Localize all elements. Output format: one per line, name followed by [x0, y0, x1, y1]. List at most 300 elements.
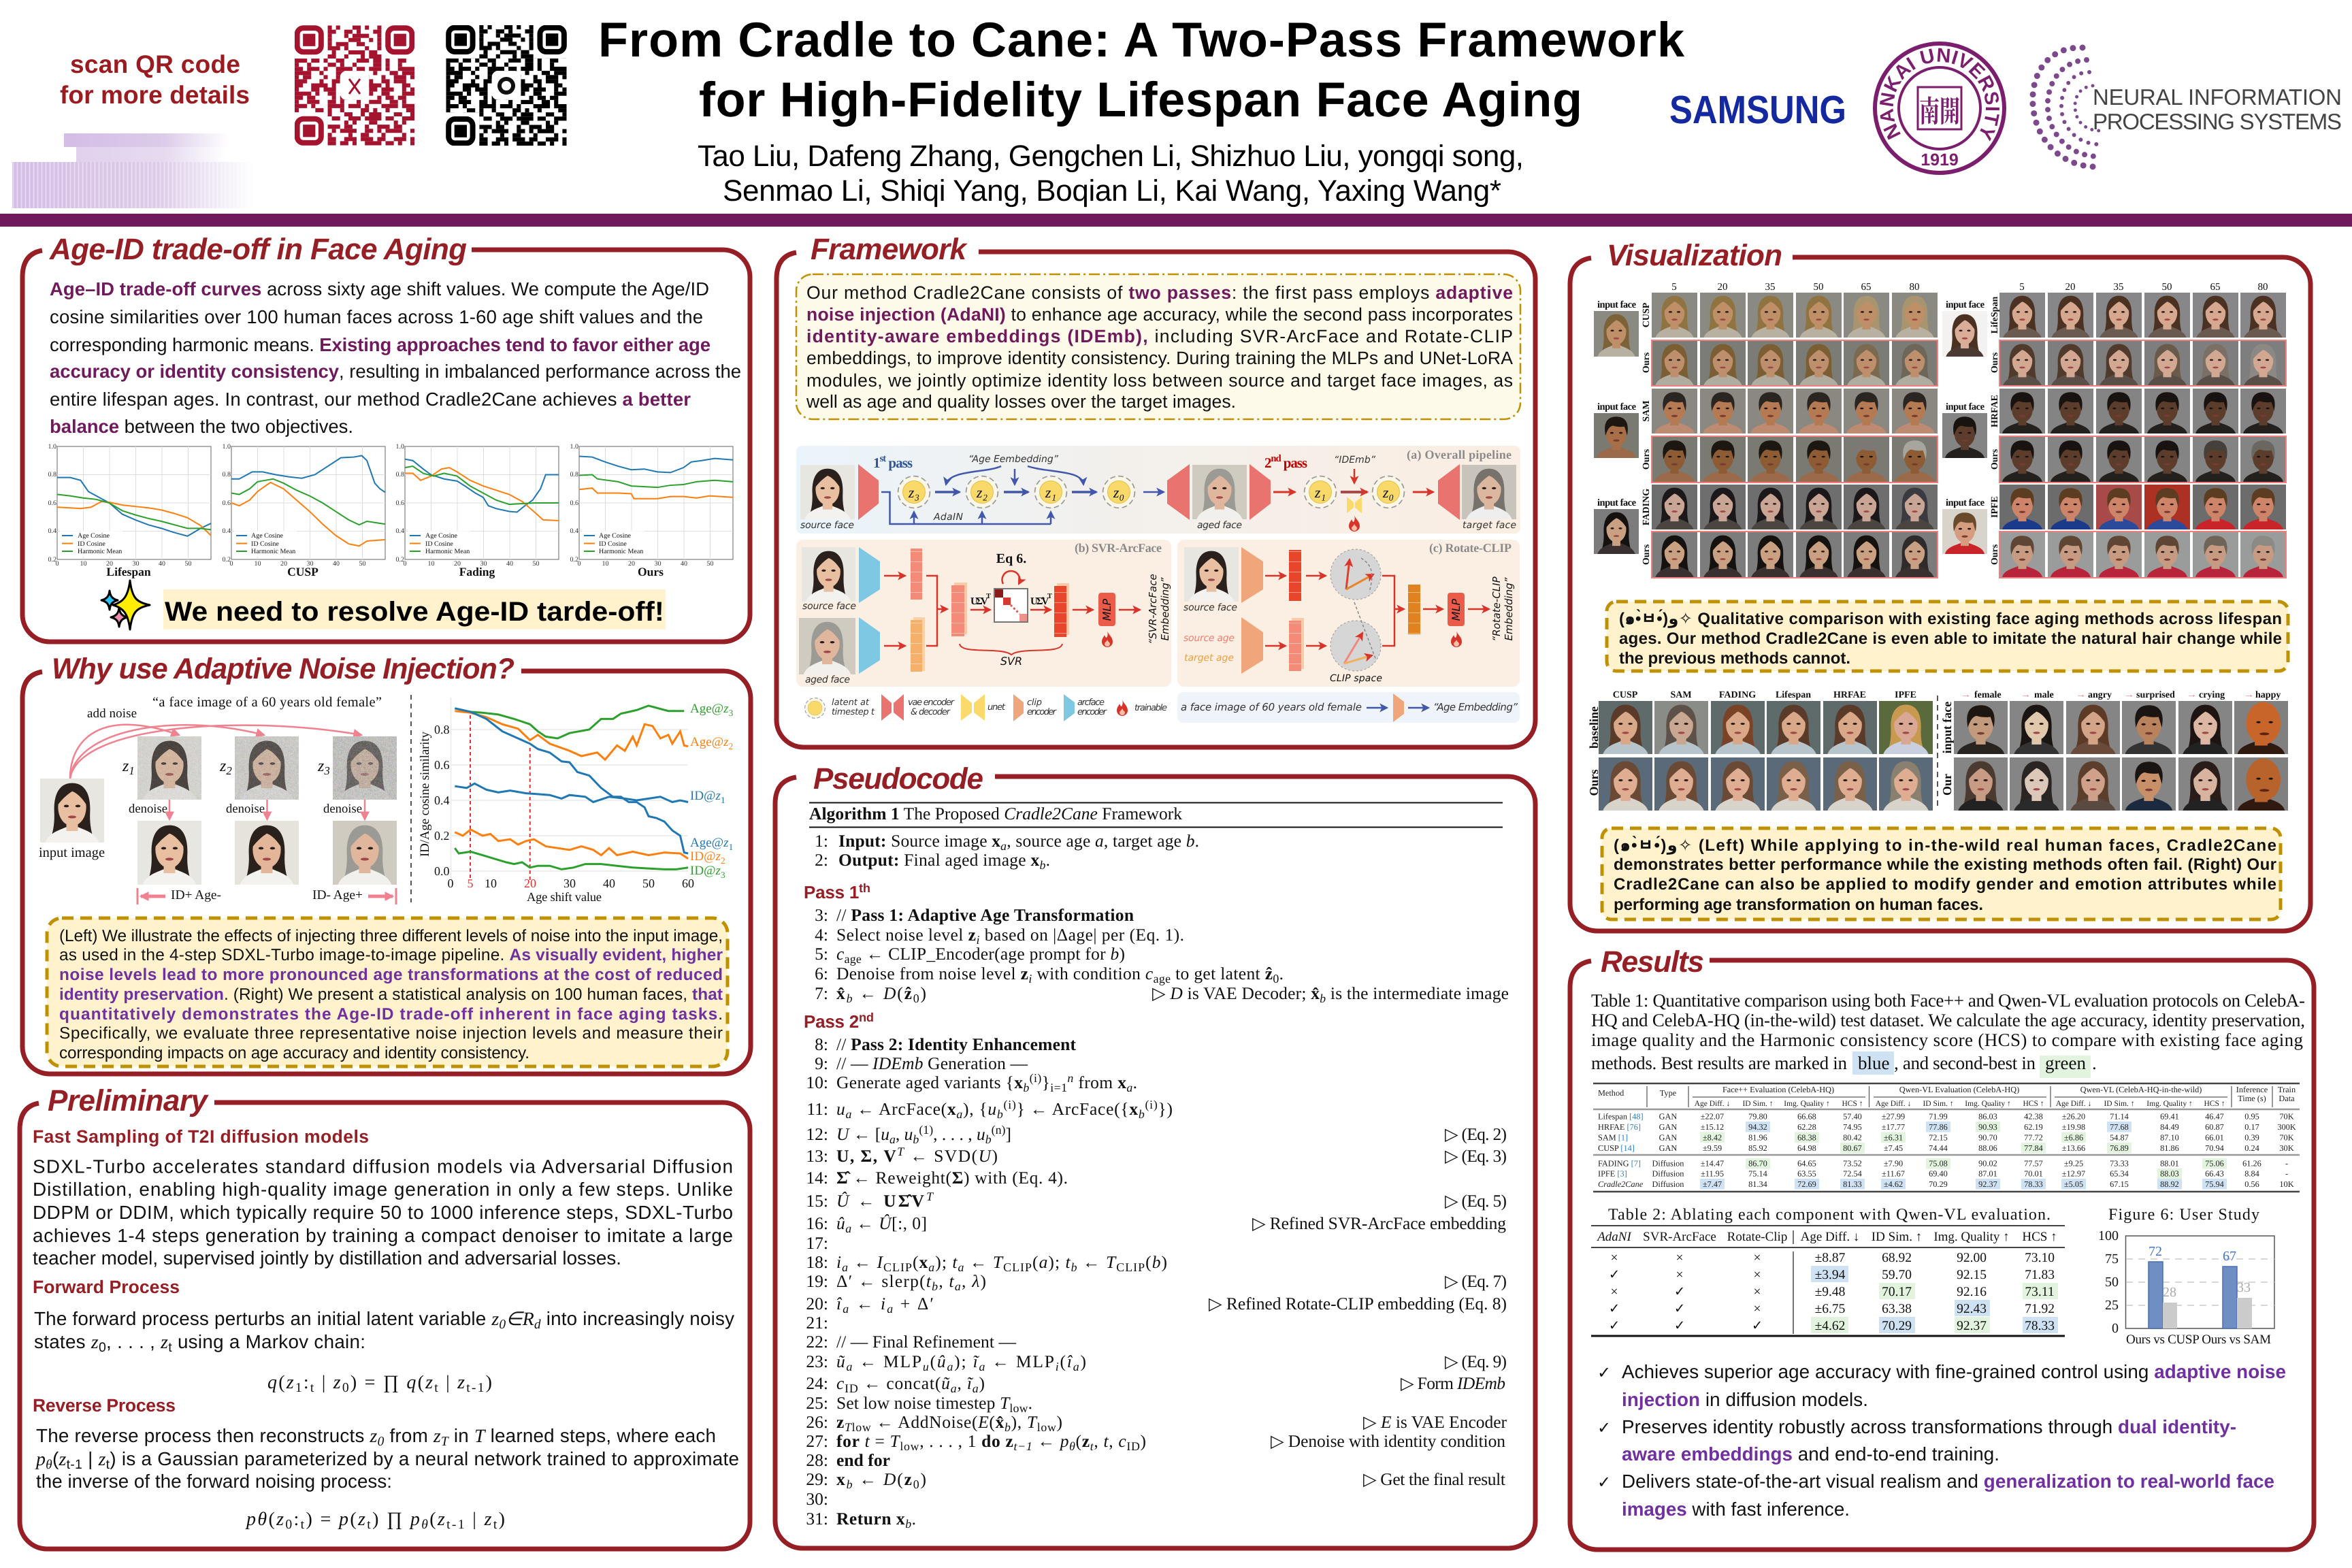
table 1: quantitative comparison: 0.95 [2244, 1112, 2259, 1122]
bar chart: user study [2098, 1206, 2274, 1347]
table 1: quantitative comparison: 88.03 [2160, 1169, 2179, 1179]
header band [0, 214, 2352, 227]
line chart: ID/Age cosine similarity: ID@z3 [690, 864, 725, 880]
image grid: attribute editing [1940, 689, 2288, 811]
diagram: (b) SVR-ArcFace: Eq 6. [996, 551, 1026, 566]
chart: Fading: 0.6 [396, 500, 404, 507]
table 1: quantitative comparison: 78.33 [2024, 1179, 2043, 1189]
table 2: ablation: HCS ↑ [2022, 1230, 2057, 1244]
chart: Fading: 20 [454, 560, 461, 568]
chart: CUSP: ID Cosine [251, 540, 279, 548]
diagram: (c) Rotate-CLIP: source face [1183, 602, 1237, 613]
table 1: quantitative comparison: 92.37 [1978, 1179, 1997, 1189]
table 1: quantitative comparison: Time (s) [2238, 1094, 2266, 1103]
table 1: quantitative comparison: 81.96 [1748, 1132, 1767, 1142]
table 1: quantitative comparison: 73.33 [2110, 1158, 2129, 1168]
list: key results: Preserves identity robustly across transformations through dual identity- [1622, 1416, 2236, 1437]
table 1: quantitative comparison: 62.19 [2024, 1122, 2043, 1132]
table 1: quantitative comparison: 76.89 [2110, 1143, 2129, 1153]
line chart: ID/Age cosine similarity: 60 [682, 877, 694, 890]
chart: CUSP: 40 [333, 560, 340, 568]
list: key results: Delivers state-of-the-art visual realism and generalization to real-world face [1622, 1471, 2274, 1492]
image grid: in-the-wild faces: CUSP [1613, 690, 1638, 700]
table 2: ablation: ±4.62 [1815, 1319, 1845, 1333]
legend: diagram symbols: timestep t [832, 707, 875, 717]
table 2: ablation: ✓ [1752, 1319, 1763, 1333]
table 2: ablation: 73.11 [2025, 1285, 2055, 1299]
chart: Fading: Harmonic Mean [425, 548, 470, 555]
chart: Lifespan: ID Cosine [78, 540, 105, 548]
algorithm: ia ← ICLIP(xa); ta ← TCLIP(a); tb ← TCLIP(b) [836, 1252, 1167, 1274]
legend: diagram symbols: trainable [1134, 703, 1167, 713]
diagram: (c) Rotate-CLIP: (c) Rotate-CLIP [1429, 541, 1512, 555]
text block: description: cosine similarities over 100 human faces across 1-60 age shift values and the [50, 306, 703, 327]
line chart: ID/Age cosine similarity: ID@z1 [690, 789, 725, 805]
table 1: quantitative comparison: 77.86 [1929, 1122, 1948, 1132]
table 1: quantitative comparison: 42.38 [2024, 1112, 2043, 1122]
image grid: lifespan comparison left: 80 [1910, 282, 1919, 293]
image grid: in-the-wild faces: baseline [1587, 706, 1601, 749]
panel: Results [1570, 945, 2314, 1550]
bar chart: user study: 75 [2105, 1252, 2119, 1267]
title: for High-Fidelity Lifespan Face Aging [699, 73, 1582, 127]
chart: Ours: 1.0 [570, 443, 578, 451]
title [598, 13, 1685, 127]
equation: reverse: pθ(z0:t) = p(zt) ∏ pθ(zt-1 | zt) [245, 1509, 505, 1532]
table 1: quantitative comparison: 88.06 [1978, 1143, 1997, 1153]
image grid: lifespan comparison left [1594, 282, 1938, 578]
line chart: ID/Age cosine similarity: 0.8 [434, 723, 449, 736]
table 2: ablation: 92.16 [1957, 1285, 1987, 1299]
list: key results: images with fast inference. [1622, 1499, 1850, 1520]
diagram: (b) SVR-ArcFace: (b) SVR-ArcFace [1075, 541, 1162, 555]
chart: Fading: Age Cosine [425, 532, 457, 540]
image grid: lifespan comparison left: 35 [1765, 282, 1775, 293]
list: key results: injection in diffusion models. [1622, 1389, 1868, 1410]
authors: Senmao Li, Shiqi Yang, Boqian Li, Kai Wang, Yaxing Wang* [723, 174, 1501, 208]
table 2: ablation: ✓ [1609, 1268, 1620, 1282]
legend: diagram symbols: clip [1027, 698, 1042, 708]
chart: Fading [396, 443, 559, 578]
diagram: (b) SVR-ArcFace: Embedding” [1159, 577, 1171, 640]
image grid: lifespan comparison left: SAM [1642, 400, 1652, 422]
table 2: ablation: ✓ [1609, 1302, 1620, 1316]
callout: method summary: well as age and quality losses over the target images. [806, 391, 1236, 412]
chart: CUSP [222, 443, 385, 578]
diagram: (a) overall pipeline: z₀ [1382, 484, 1394, 501]
heading: Preliminary [48, 1084, 210, 1117]
table 1 caption: methods. Best results are marked in [1591, 1053, 1847, 1073]
table 1: quantitative comparison: 64.98 [1797, 1143, 1816, 1153]
subheading: forward process: Forward Process [33, 1277, 180, 1297]
logo: Nankai University: 南開 [1919, 87, 1960, 131]
image grid: lifespan comparison right: Ours [1990, 448, 2000, 470]
figure: noise injection illustration: add noise [87, 706, 137, 721]
callout: method summary: modules, we jointly optimize identity loss between source and target face images, as [806, 370, 1513, 391]
table 2: ablation: 70.29 [1882, 1319, 1912, 1333]
table 1: quantitative comparison: 75.94 [2205, 1179, 2224, 1189]
algorithm: ▷ Form IDEmb [1401, 1373, 1505, 1393]
table 1: quantitative comparison: GAN [1659, 1143, 1677, 1153]
header text: scan QR code: for more details [60, 81, 250, 109]
table 1: quantitative comparison: 0.39 [2244, 1132, 2259, 1142]
algorithm: x̂b ← D(ẑ0) [836, 983, 926, 1005]
line chart: ID/Age cosine similarity: 10 [485, 877, 497, 890]
table 1: quantitative comparison: ±17.77 [1882, 1122, 1905, 1132]
callout: qualitative comparison [1607, 602, 2288, 671]
table 1: quantitative comparison: ID Sim. ↑ [1923, 1100, 1954, 1108]
table 1: quantitative comparison: - [2285, 1158, 2288, 1168]
chart: Lifespan: 0.2 [48, 556, 56, 564]
algorithm: 16: [806, 1213, 828, 1233]
chart: Ours: ID Cosine [599, 540, 627, 548]
table 2: ablation: ±8.87 [1815, 1251, 1846, 1265]
table 1: quantitative comparison [1593, 1083, 2300, 1192]
image grid: lifespan comparison left: CUSP [1642, 302, 1652, 327]
diagram: (c) Rotate-CLIP: “Rotate-CLIP [1490, 576, 1503, 642]
chart: Lifespan: 0.4 [48, 527, 56, 535]
chart: CUSP: 0.6 [222, 500, 231, 507]
diagram: (b) SVR-ArcFace: aged face [805, 674, 850, 685]
image grid: lifespan comparison right: Ours [1990, 352, 2000, 373]
table 1: quantitative comparison: HRFAE [76] [1598, 1122, 1641, 1132]
algorithm: 30: [806, 1489, 828, 1509]
table 1: quantitative comparison: 70.29 [1929, 1179, 1948, 1189]
figure: noise injection illustration: “a face image of a 60 years old female” [152, 695, 382, 710]
callout: method summary: noise injection (AdaNI) to enhance age accuracy, while the second pass incorporates [806, 304, 1513, 325]
line chart: ID/Age cosine similarity: 5 [467, 877, 474, 890]
table 1: quantitative comparison: 77.84 [2024, 1143, 2043, 1153]
table 1: quantitative comparison: 70.01 [2024, 1169, 2043, 1179]
chart: Lifespan: 0 [56, 560, 59, 568]
table 1: quantitative comparison: 80.42 [1843, 1132, 1862, 1142]
table 1: quantitative comparison: 72.54 [1843, 1169, 1862, 1179]
table 1: quantitative comparison: ±19.98 [2062, 1122, 2085, 1132]
table 1: quantitative comparison: Age Diff. ↓ [1695, 1100, 1730, 1108]
table 1: quantitative comparison: Face++ Evaluation (CelebA-HQ) [1722, 1085, 1834, 1094]
image grid: lifespan comparison right: IPFE [1990, 496, 2000, 518]
image grid: lifespan comparison right: 50 [2161, 282, 2172, 293]
image grid: lifespan comparison left: input face [1597, 299, 1637, 310]
diagram: (a) overall pipeline: aged face [1197, 520, 1242, 531]
line chart: ID/Age cosine similarity: 0.6 [434, 758, 449, 772]
QR code: GitHub [446, 25, 566, 146]
table 1: quantitative comparison: ±7.47 [1703, 1179, 1722, 1189]
table 1: quantitative comparison: 87.10 [2160, 1132, 2179, 1142]
algorithm: // Pass 1: Adaptive Age Transformation [836, 905, 1134, 925]
table 1: quantitative comparison: 8.84 [2244, 1169, 2259, 1179]
image grid: lifespan comparison left: Ours [1642, 544, 1652, 565]
legend: diagram symbols: encoder [1027, 707, 1058, 717]
line chart: ID/Age cosine similarity: 0.2 [434, 829, 449, 843]
legend: diagram symbols: vae encoder [908, 698, 956, 708]
table 1: quantitative comparison: 70K [2279, 1132, 2294, 1142]
callout: noise explanation [47, 918, 728, 1066]
diagram: (a) overall pipeline: 2nd pass [1264, 453, 1307, 471]
heading: Why use Adaptive Noise Injection? [52, 653, 514, 685]
list: key results: ✓ [1597, 1473, 1611, 1492]
panel: Preliminary [20, 1084, 750, 1549]
table 1: quantitative comparison: 81.34 [1748, 1179, 1767, 1189]
table 2: ablation: Table 2: Ablating each component with Qwen-VL evaluation. [1608, 1206, 2051, 1224]
diagram: (b) SVR-ArcFace [796, 540, 1171, 687]
diagram: (b) SVR-ArcFace: UΣ̂VT [1030, 593, 1052, 607]
image grid: lifespan comparison right: HRFAE [1990, 395, 2000, 427]
table 1: quantitative comparison: FADING [7] [1598, 1158, 1641, 1168]
table 1: quantitative comparison: Img. Quality ↑ [2146, 1100, 2193, 1108]
table 1: quantitative comparison: 71.14 [2110, 1112, 2129, 1122]
image grid: lifespan comparison right: 5 [2019, 282, 2025, 293]
line chart: ID/Age cosine similarity: 0 [448, 877, 453, 890]
table 1: quantitative comparison: ID Sim. ↑ [2104, 1100, 2135, 1108]
table 1: quantitative comparison: IPFE [3] [1598, 1169, 1627, 1179]
chart: Fading: 1.0 [396, 443, 404, 451]
legend: diagram symbols [805, 694, 1167, 721]
table 1: quantitative comparison: ±13.66 [2062, 1143, 2085, 1153]
table 2: ablation: 59.70 [1882, 1268, 1912, 1282]
table 1: quantitative comparison: Lifespan [48] [1598, 1112, 1644, 1122]
image grid: attribute editing: Our [1940, 774, 1954, 796]
table 1: quantitative comparison: 87.01 [1978, 1169, 1997, 1179]
algorithm: 17: [806, 1233, 828, 1253]
table 2: ablation: 73.10 [2025, 1251, 2055, 1265]
image grid: attribute editing: → [2021, 689, 2031, 700]
figure: noise injection illustration: z3 [317, 757, 330, 777]
figure: noise injection illustration: ID+ Age- [171, 888, 221, 902]
chart: Lifespan: Harmonic Mean [78, 548, 122, 555]
diagram: (a) overall pipeline: “Age Eembedding” [968, 454, 1059, 465]
algorithm: cage ← CLIP_Encoder(age prompt for b) [836, 944, 1125, 966]
table 2: ablation: ±3.94 [1815, 1268, 1846, 1282]
table 2: ablation: × [1753, 1251, 1761, 1265]
diagram: (b) SVR-ArcFace: “SVR-ArcFace [1147, 574, 1159, 644]
diagram: (a) overall pipeline: (a) Overall pipeline [1407, 448, 1512, 461]
image grid: attribute editing: angry [2088, 690, 2112, 700]
table 1 caption: , and second-best in [1894, 1053, 2036, 1073]
callout: method summary: identity-aware embeddings (IDEmb), including SVR-ArcFace and Rotate-CLIP [806, 326, 1513, 346]
chart: CUSP: 50 [359, 560, 366, 568]
table 1: quantitative comparison: Data [2278, 1094, 2295, 1103]
chart: Fading: ID Cosine [425, 540, 453, 548]
text block: fast sampling: DDPM or DDIM, which typically require 50 to 1000 inference steps, SDXL-Turbo [33, 1202, 733, 1223]
algorithm: cID ← concat(ũa, ĩa) [836, 1373, 985, 1395]
callout: method summary: embeddings, to improve identity consistency. During training the MLPs and UNet-LoRA [806, 348, 1513, 368]
table 1: quantitative comparison: ±27.99 [1882, 1112, 1905, 1122]
chart: Lifespan: 1.0 [48, 443, 56, 451]
callout: qualitative comparison: the previous methods cannot. [1619, 649, 1850, 668]
algorithm: // — IDEmb Generation — [836, 1054, 1028, 1073]
table 1: quantitative comparison: Img. Quality ↑ [1965, 1100, 2011, 1108]
algorithm: 31: [806, 1509, 828, 1529]
chart: CUSP: 20 [280, 560, 287, 568]
table 1: quantitative comparison: 66.01 [2205, 1132, 2224, 1142]
table 1: quantitative comparison: Diffusion [1652, 1179, 1684, 1189]
line chart: ID/Age cosine similarity: 20 [524, 877, 536, 890]
table 2: ablation: × [1676, 1251, 1684, 1265]
bar chart: user study: 100 [2098, 1228, 2119, 1243]
table 1: quantitative comparison: ±9.25 [2064, 1158, 2083, 1168]
chart: Lifespan: 50 [185, 560, 192, 568]
diagram: (a) overall pipeline: AdaIN [933, 512, 964, 523]
table 1: quantitative comparison: Type [1660, 1088, 1677, 1098]
chart: Ours: 50 [706, 560, 713, 568]
table 1: quantitative comparison: ±7.90 [1884, 1158, 1903, 1168]
table 1: quantitative comparison: 90.02 [1978, 1158, 1997, 1168]
table 2: ablation: ✓ [1674, 1285, 1685, 1299]
algorithm: end for [836, 1450, 890, 1470]
table 1: quantitative comparison: ±14.47 [1701, 1158, 1724, 1168]
table 1: quantitative comparison: 90.70 [1978, 1132, 1997, 1142]
QR code: paper [295, 26, 414, 146]
table 1: quantitative comparison: CUSP [14] [1598, 1143, 1635, 1153]
algorithm: ▷ (Eq. 3) [1445, 1146, 1507, 1166]
algorithm: 10: [806, 1073, 828, 1092]
image grid: attribute editing: → [2244, 689, 2254, 700]
legend: diagram symbols: encoder [1077, 707, 1108, 717]
table 2: ablation: SVR-ArcFace [1643, 1230, 1716, 1244]
table 2: ablation: × [1676, 1268, 1684, 1282]
table 1: quantitative comparison: ±9.59 [1703, 1143, 1722, 1153]
legend: diagram symbols: unet [987, 702, 1006, 713]
algorithm: 12: [806, 1124, 828, 1144]
chart: Ours: 40 [681, 560, 687, 568]
diagram: (a) overall pipeline: z₂ [976, 484, 987, 501]
algorithm: Δ′ ← slerp(tb, ta, λ) [836, 1271, 986, 1293]
diagram: (a) overall pipeline: source face [800, 520, 854, 531]
table 2: ablation [1591, 1206, 2065, 1336]
algorithm: ũa ← MLPu(ûa); ĩa ← MLPi(îa) [836, 1352, 1086, 1373]
table 1: quantitative comparison: 75.08 [1929, 1158, 1948, 1168]
bar chart: user study: 50 [2105, 1275, 2119, 1290]
table 2: ablation: ±9.48 [1815, 1285, 1845, 1299]
chart: CUSP: Harmonic Mean [251, 548, 295, 555]
chart: CUSP: 1.0 [222, 443, 231, 451]
chart: Fading: 0.2 [396, 556, 404, 564]
diagram: (c) Rotate-CLIP [1177, 540, 1520, 687]
table 1: quantitative comparison: ±4.62 [1884, 1179, 1903, 1189]
bar chart: user study: 67 [2223, 1249, 2236, 1264]
image grid: attribute editing: male [2034, 690, 2054, 700]
table 1: quantitative comparison: 300K [2277, 1122, 2296, 1132]
image grid: lifespan comparison right: LifeSpan [1990, 297, 2000, 333]
chart: Ours: Harmonic Mean [599, 548, 643, 555]
line chart: ID/Age cosine similarity: Age@z1 [690, 836, 733, 852]
table 1: quantitative comparison: 30K [2279, 1143, 2294, 1153]
callout: noise explanation: (Left) We illustrate the effects of injecting three different levels of noise into the input image, [59, 927, 723, 945]
image grid: lifespan comparison left: FADING [1642, 489, 1652, 525]
diagram: (a) overall pipeline [796, 446, 1520, 534]
chart: Lifespan: 0.8 [48, 471, 56, 478]
algorithm: 7: [815, 983, 828, 1003]
table 1: quantitative comparison: Diffusion [1652, 1169, 1684, 1179]
bar chart: user study: 28 [2163, 1285, 2176, 1300]
callout: method summary [796, 274, 1520, 419]
algorithm: Input: Source image xa, source age a, target age b. [838, 831, 1199, 853]
line chart: ID/Age cosine similarity: ID/Age cosine similarity [418, 731, 432, 857]
panel: Why use Adaptive Noise Injection [22, 653, 751, 1074]
text block: reverse process: pθ(zt-1 | zt) is a Gaussian parameterized by a neural network trained to approximate [35, 1448, 739, 1472]
table 1: quantitative comparison: Qwen-VL Evaluation (CelebA-HQ) [1899, 1085, 2019, 1094]
chart: Ours [570, 443, 733, 578]
table 1: quantitative comparison: 72.15 [1929, 1132, 1948, 1142]
callout: qualitative comparison: (๑•̀ㅂ•́)و✧ Qualitative comparison with existing face aging methods across lifespan [1619, 609, 2282, 628]
table 1: quantitative comparison: 0.24 [2244, 1143, 2259, 1153]
table 1 caption: Table 1: Quantitative comparison using both Face++ and Qwen-VL evaluation protocols on CelebA- [1591, 990, 2305, 1011]
table 1: quantitative comparison: 46.47 [2205, 1112, 2224, 1122]
image grid: lifespan comparison left: Ours [1642, 352, 1652, 373]
algorithm: Output: Final aged image xb. [838, 850, 1050, 872]
table 2: ablation: Rotate-Clip [1727, 1230, 1787, 1244]
callout: wild faces and attributes: Cradle2Cane can also be applied to modify gender and emotion attributes while [1614, 875, 2276, 894]
table 2: ablation: 70.17 [1882, 1285, 1912, 1299]
table 1: quantitative comparison: 10K [2279, 1179, 2294, 1189]
image grid: in-the-wild faces: Lifespan [1776, 690, 1811, 700]
table 1: quantitative comparison: 81.33 [1843, 1179, 1862, 1189]
image grid: attribute editing: → [2187, 689, 2197, 700]
table 1: quantitative comparison: 74.95 [1843, 1122, 1862, 1132]
diagram: (c) Rotate-CLIP: target age [1184, 653, 1234, 664]
logo: NeurIPS: PROCESSING SYSTEMS [2093, 109, 2342, 134]
illustration: university building [12, 133, 255, 208]
algorithm: ua ← ArcFace(xa), {ub(i)} ← ArcFace({xb(i)}) [836, 1098, 1173, 1121]
diagram: age embedding [1177, 692, 1520, 723]
algorithm: 1: [815, 831, 828, 851]
table 1: quantitative comparison: 77.68 [2110, 1122, 2129, 1132]
figure: noise injection illustration: z1 [122, 757, 135, 777]
algorithm: zTlow ← AddNoise(E(x̂b), Tlow) [836, 1412, 1062, 1434]
table 1: quantitative comparison: 71.99 [1929, 1112, 1948, 1122]
image grid: lifespan comparison left: Ours [1642, 448, 1652, 470]
bar chart: user study: 0 [2112, 1321, 2119, 1336]
table 1: quantitative comparison: 90.93 [1978, 1122, 1997, 1132]
table 1: quantitative comparison: Age Diff. ↓ [2056, 1100, 2091, 1108]
line chart: ID/Age cosine similarity: 0.0 [434, 864, 449, 878]
image grid: lifespan comparison right: 20 [2065, 282, 2076, 293]
algorithm: 14: [806, 1168, 828, 1188]
diagram: (b) SVR-ArcFace: source face [802, 601, 856, 612]
chart: Fading: 0.8 [396, 471, 404, 478]
algorithm: 20: [806, 1294, 828, 1313]
table 1: quantitative comparison: 84.49 [2160, 1122, 2179, 1132]
table 1: quantitative comparison: HCS ↑ [1842, 1100, 1863, 1108]
chart: Lifespan: Age Cosine [78, 532, 110, 540]
subheading: fast sampling: Fast Sampling of T2I diffusion models [33, 1126, 369, 1147]
table 1: quantitative comparison: 70.94 [2205, 1143, 2224, 1153]
table 2: ablation: 68.92 [1882, 1251, 1912, 1265]
chart: CUSP: 10 [255, 560, 261, 568]
chart: Fading: 50 [532, 560, 539, 568]
chart: Ours: 30 [655, 560, 662, 568]
table 1: quantitative comparison: 63.55 [1797, 1169, 1816, 1179]
image grid: in-the-wild faces: HRFAE [1833, 690, 1866, 700]
table 2: ablation: 92.37 [1957, 1319, 1987, 1333]
chart: Ours: 10 [602, 560, 608, 568]
diagram: (c) Rotate-CLIP: MLP [1450, 598, 1463, 621]
table 2: ablation: 92.43 [1957, 1302, 1987, 1316]
table 1: quantitative comparison: Age Diff. ↓ [1876, 1100, 1911, 1108]
text block: fast sampling [33, 1156, 733, 1269]
figure: noise injection illustration: denoise [226, 802, 265, 816]
table 1: quantitative comparison: 54.87 [2110, 1132, 2129, 1142]
image grid: in-the-wild faces: FADING [1719, 690, 1756, 700]
chart: Ours: 0.2 [570, 556, 578, 564]
table 1: quantitative comparison: 88.92 [2160, 1179, 2179, 1189]
chart: Ours: Age Cosine [599, 532, 632, 540]
title: From Cradle to Cane: A Two-Pass Framework [598, 13, 1685, 67]
table 1: quantitative comparison: Inference [2236, 1085, 2268, 1094]
table 2: ablation: × [1753, 1268, 1761, 1282]
equation: forward: q(z1:t | z0) = ∏ q(zt | zt-1) [267, 1372, 492, 1395]
